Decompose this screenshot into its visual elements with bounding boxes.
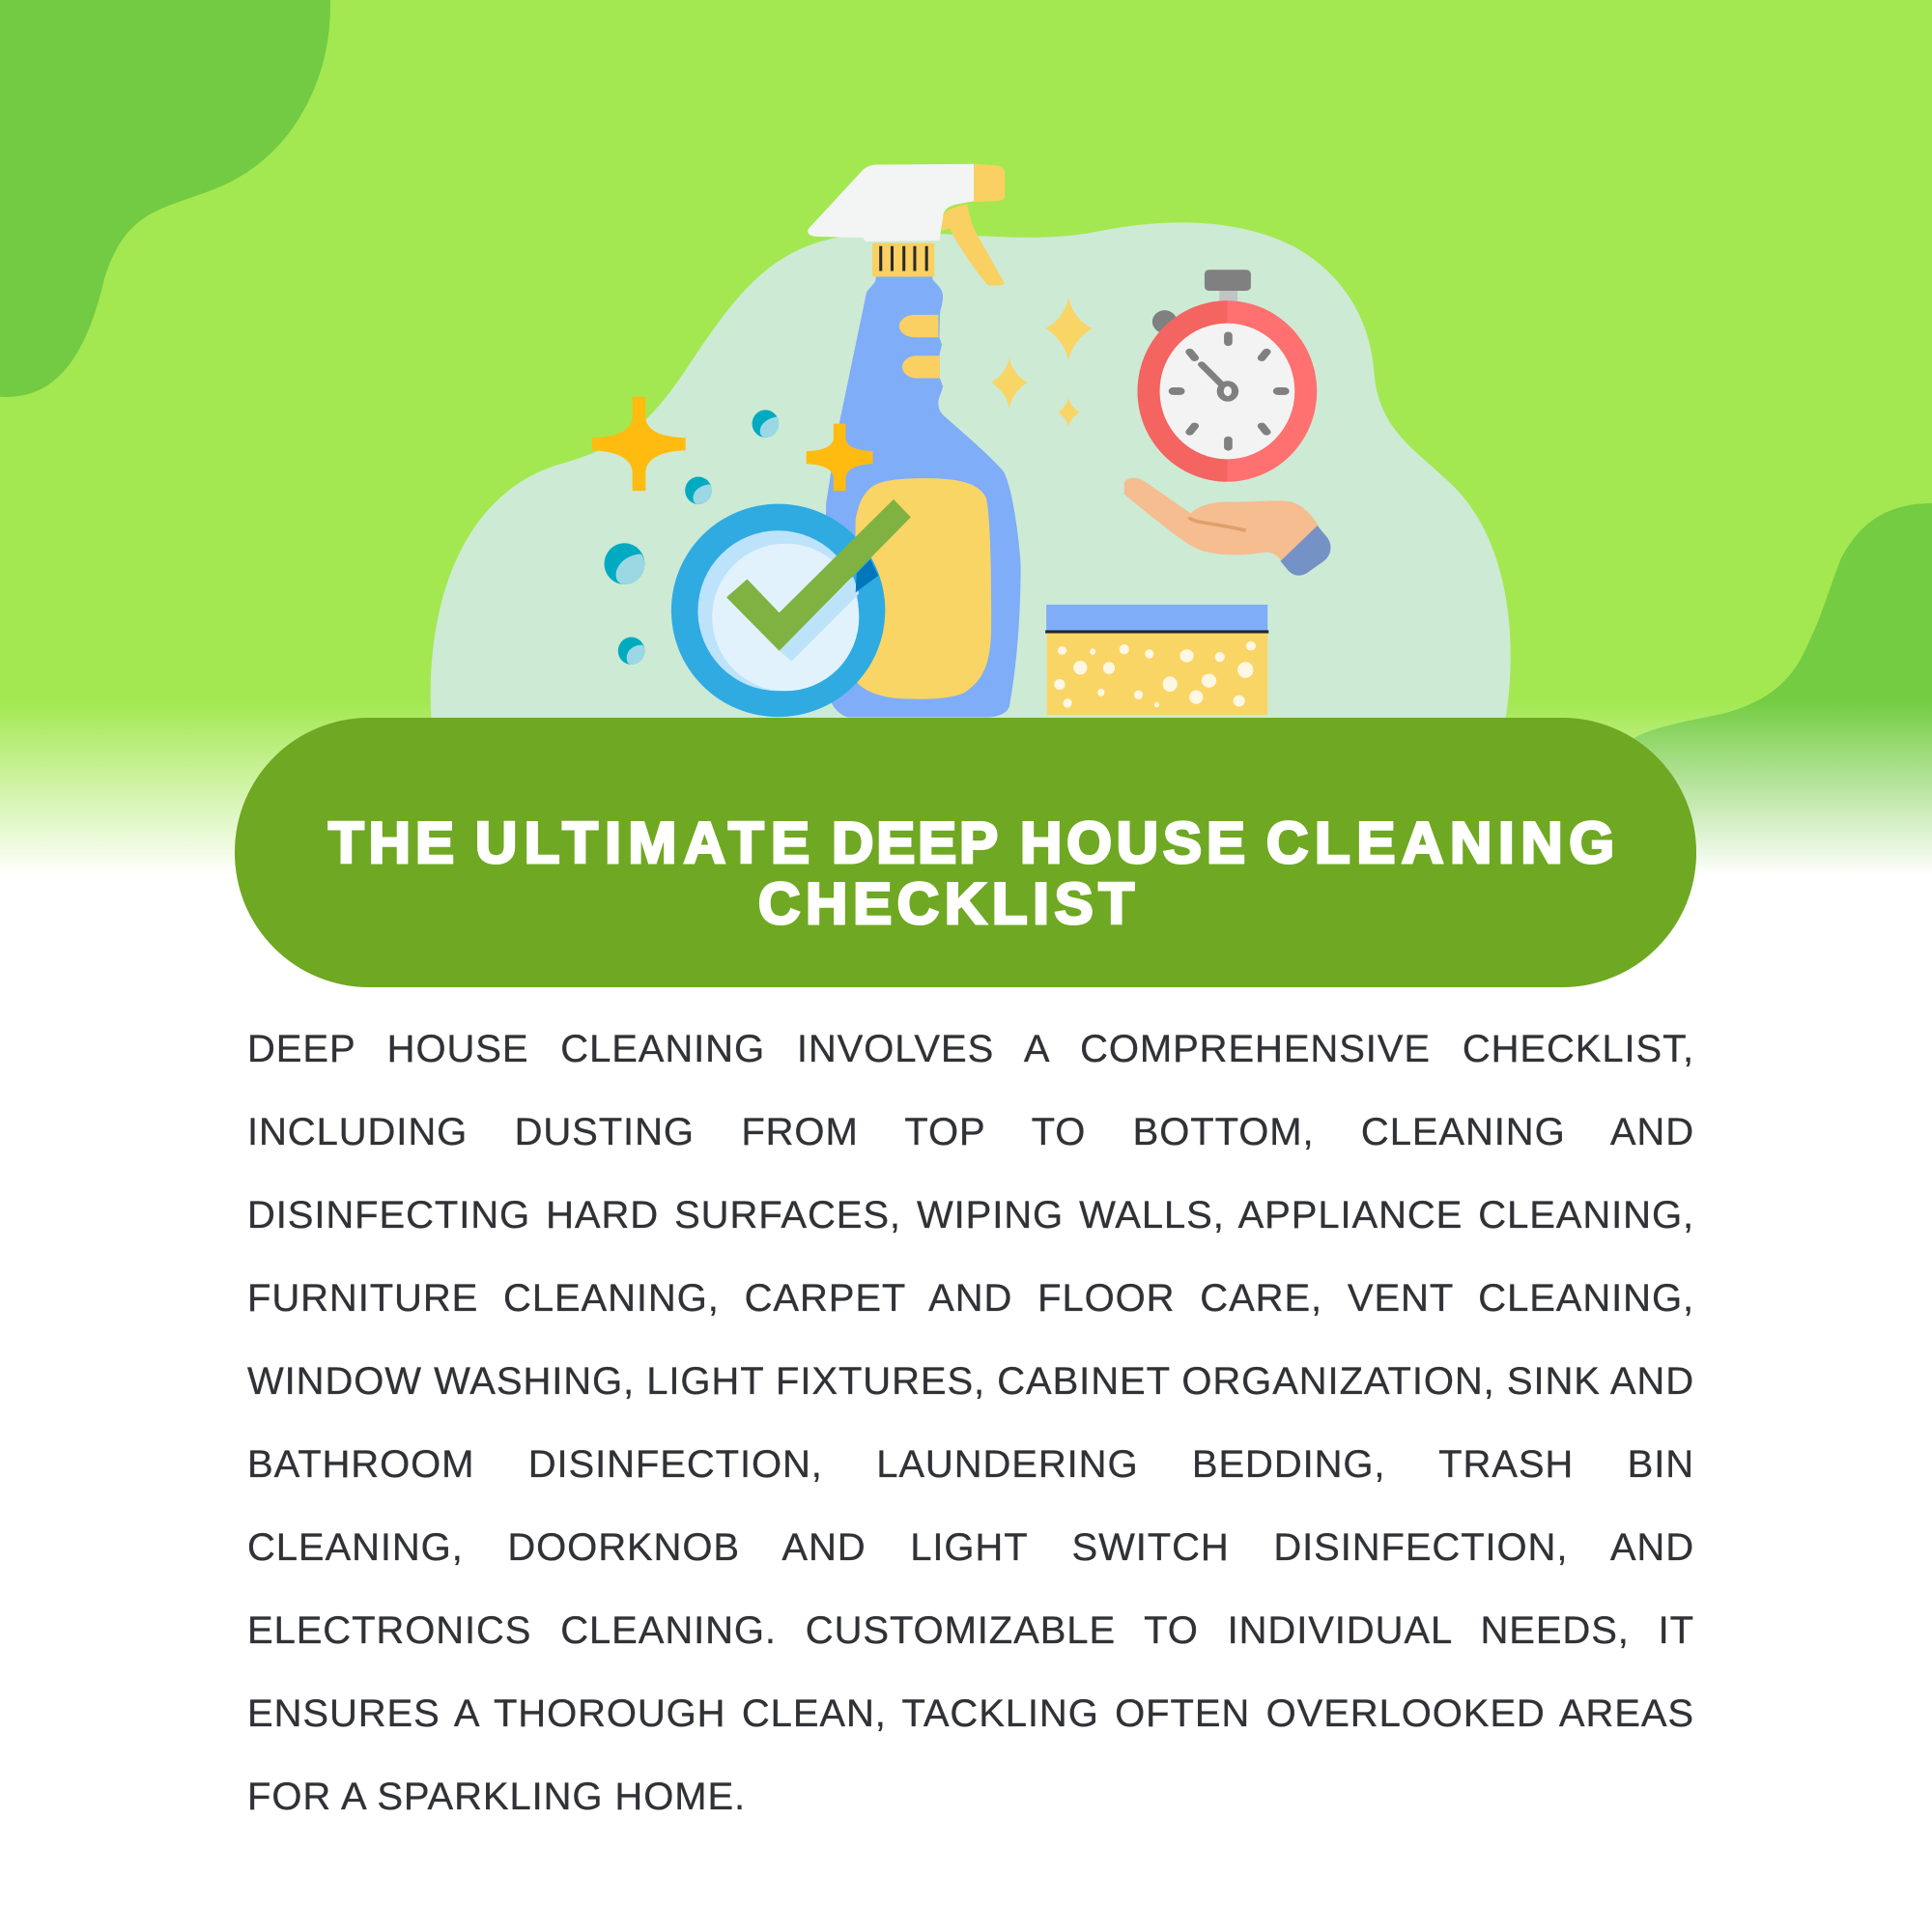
spray head [808,164,974,242]
icon: spray bottle [808,164,1021,718]
bottle grips [899,315,940,379]
blob: right side [1633,503,1932,875]
badge face [712,544,859,691]
background: lime green [0,0,1932,875]
icon: gold sparkles [592,397,873,491]
icon: bubbles [605,410,779,665]
cuff [1281,526,1330,576]
body text: CLEANING, DOORKNOB AND LIGHT SWITCH DISINFECTION, AND [247,1526,1694,1569]
bubble 2 [685,477,712,504]
spray trigger [942,205,1005,285]
bubble 4 [618,638,644,665]
body text: ELECTRONICS CLEANING. CUSTOMIZABLE TO INDIVIDUAL NEEDS, IT [247,1609,1694,1652]
title line 1: THE [328,810,454,875]
bubble 3 [605,543,644,584]
check mark [726,499,911,651]
icon: check badge [671,499,911,717]
collar ridges [881,246,926,270]
check shadow [780,577,859,661]
blob: pale mint backdrop [431,222,1511,719]
white fade at bottom of header [0,700,1932,876]
badge ring [671,504,885,717]
illustration: cleaning supplies [592,164,1330,718]
title [328,810,1614,936]
body text: DEEP HOUSE CLEANING INVOLVES A COMPREHENSIVE CHECKLIST, [247,1028,1694,1070]
body text: INCLUDING DUSTING FROM TOP TO BOTTOM, CLEANING AND [247,1111,1694,1153]
case [1138,300,1317,482]
spray nozzle [974,164,1005,202]
icon: stopwatch [1138,270,1317,482]
body text: FOR A SPARKLING HOME. [247,1776,746,1818]
body text [247,1028,1694,1818]
sponge seam [1045,630,1268,634]
stem [1219,291,1237,302]
blob: top-left corner [0,0,330,397]
icon: sparkles yellow [991,297,1093,427]
bottle label [853,478,991,699]
badge inner [697,530,859,691]
sponge base [1047,634,1267,715]
body text: BATHROOM DISINFECTION, LAUNDERING BEDDING, TRASH BIN [247,1443,1694,1486]
body text: DISINFECTING HARD SURFACES, WIPING WALLS, APPLIANCE CLEANING, [247,1194,1694,1236]
palm crease [1190,517,1246,530]
title line 1 [328,810,1614,875]
hour ticks [1174,335,1285,447]
icon: sponge [1045,605,1268,715]
check dark accent [856,559,878,592]
title line 1: HOUSE [1020,810,1245,875]
body text: WINDOW WASHING, LIGHT FIXTURES, CABINET ORGANIZATION, SINK AND [247,1360,1694,1403]
pivot [1220,384,1236,399]
title line 1: DEEP [832,810,998,875]
title line 1: CLEANING [1266,810,1614,875]
bottle body [825,276,1021,718]
bubble 1 [753,410,779,438]
title line 2: CHECKLIST [758,871,1134,936]
sponge holes [1054,641,1256,708]
bottle collar [872,243,934,276]
body text: FURNITURE CLEANING, CARPET AND FLOOR CARE, VENT CLEANING, [247,1277,1694,1320]
clock hand [1202,364,1222,384]
side knob [1152,310,1177,333]
icon: open hand [1124,478,1330,576]
title banner: green pill [235,718,1696,987]
title line 1: ULTIMATE [475,810,810,875]
case shade [1138,300,1227,482]
body text: ENSURES A THOROUGH CLEAN, TACKLING OFTEN OVERLOOKED AREAS [247,1692,1694,1735]
crown [1205,270,1251,291]
sponge top layer [1046,605,1267,631]
dial [1160,324,1294,459]
palm [1124,478,1319,561]
